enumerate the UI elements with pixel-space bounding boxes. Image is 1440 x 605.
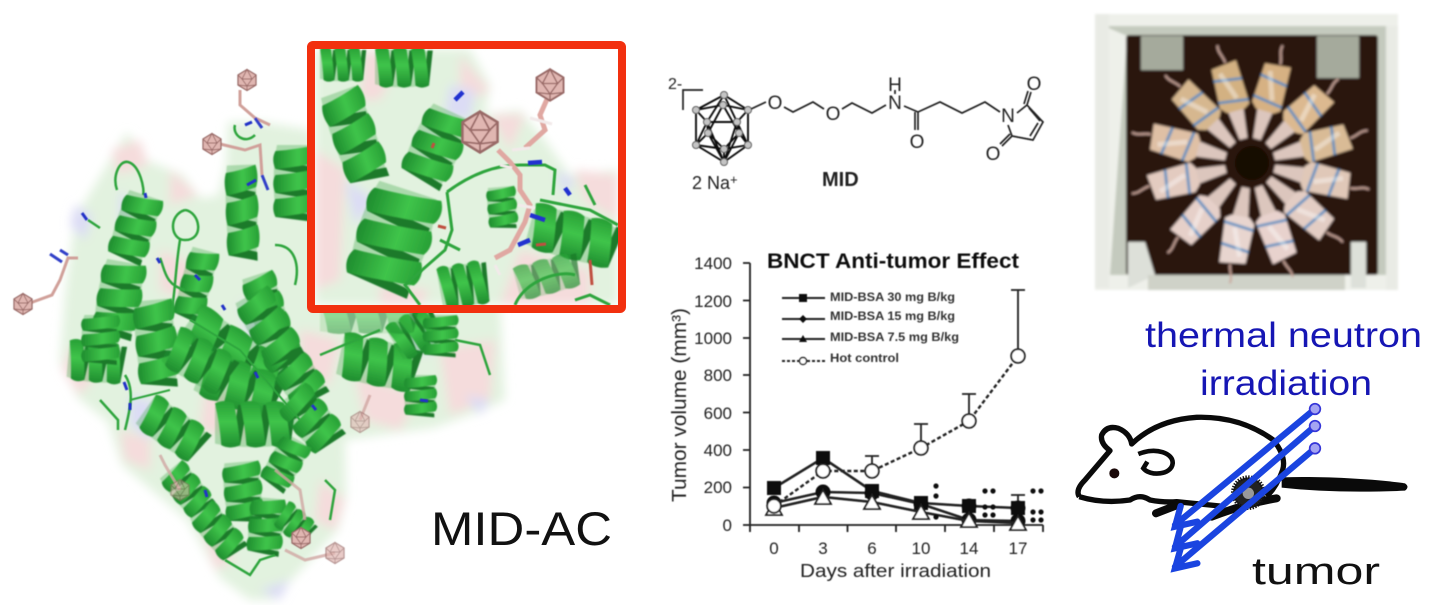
x axis labels: 17: [1009, 539, 1027, 558]
mouse ear: [1138, 451, 1173, 474]
legend: [782, 292, 959, 365]
protein loops and side chains: [88, 125, 490, 575]
atom labels: O: [826, 104, 840, 125]
y axis labels: 800: [704, 366, 732, 385]
series: MID-BSA 30 mg B/kg: [767, 451, 1025, 515]
blue side chain tips: [82, 122, 428, 497]
x axis labels: 0: [769, 539, 779, 558]
carborane cage: [692, 92, 752, 166]
x axis labels: 3: [818, 539, 828, 558]
atom labels: N: [888, 93, 902, 114]
protein ribbon helices: [66, 145, 459, 564]
x axis labels: 14: [960, 539, 978, 558]
x axis labels: 6: [867, 539, 877, 558]
tumor: [1233, 477, 1264, 508]
neutron beam arrows: [1175, 409, 1315, 568]
central gap: [1235, 146, 1269, 180]
x axis title: Days after irradiation: [800, 561, 991, 581]
panel: BNCT anti-tumor effect line chart: [669, 250, 1044, 581]
atom labels: O: [1027, 74, 1041, 95]
compound name: MID: [822, 169, 859, 191]
panel: MID chemical structure: 2 Na: [692, 173, 730, 193]
inset interior: [315, 47, 626, 311]
mice: [1128, 41, 1372, 286]
panel: red zoom inset: [311, 45, 626, 311]
panel: photo of irradiation holder with twelve mice: [1095, 14, 1398, 290]
panel: MID chemical structure: [668, 74, 1043, 193]
mouse eye: [1109, 468, 1119, 478]
atom labels: [768, 74, 1041, 165]
label: MID-AC: MID-AC: [431, 502, 612, 555]
significance asterisks: [933, 483, 1044, 523]
label: thermal neutron irradiation: [1145, 316, 1422, 403]
mouse tail: [1282, 477, 1407, 492]
label: thermal neutron irradiation: thermal neutron: [1145, 316, 1422, 355]
legend: MID-BSA 15 mg B/kg: [830, 311, 955, 323]
y axis labels: 600: [704, 404, 732, 423]
legend: MID-BSA 30 mg B/kg: [830, 292, 955, 304]
series: MID-BSA 7.5 mg B/kg: [766, 490, 1026, 530]
x axis labels: [769, 539, 1027, 558]
y axis labels: 1000: [694, 329, 732, 348]
diagram: mouse with tumor and neutron beams: [1078, 404, 1407, 568]
atom labels: O: [768, 93, 782, 114]
series: Hot control: [767, 349, 1025, 513]
charge and counter-ion text: 2-: [668, 76, 682, 93]
mouse feet: [1156, 498, 1277, 517]
beam source dots: [1310, 404, 1320, 454]
axes: [743, 263, 1043, 532]
y axis title: Tumor volume (mm³): [669, 308, 691, 502]
label: thermal neutron irradiation: irradiation: [1200, 364, 1372, 403]
y axis labels: 200: [704, 478, 732, 497]
legend: MID-BSA 7.5 mg B/kg: [830, 332, 959, 344]
atom labels: O: [910, 132, 924, 153]
panel: MID-AC protein structure: [14, 70, 505, 600]
chart title: BNCT Anti-tumor Effect: [767, 250, 1019, 273]
y axis labels: [694, 254, 732, 535]
red frame: [311, 45, 622, 309]
x axis labels: 10: [912, 539, 930, 558]
y axis labels: 1400: [694, 254, 732, 273]
legend: Hot control: [830, 353, 899, 365]
y axis labels: 1200: [694, 292, 732, 311]
boron cage linkers: [30, 90, 370, 560]
boron cages: [14, 70, 369, 564]
panel: MID chemical structure: +: [730, 172, 738, 187]
y axis labels: 400: [704, 441, 732, 460]
atom labels: H: [888, 75, 902, 96]
protein molecular surface: [60, 122, 505, 600]
atom labels: O: [986, 144, 1000, 165]
atom labels: N: [1001, 106, 1015, 127]
y axis labels: 0: [723, 516, 732, 535]
label: tumor: tumor: [1252, 551, 1380, 593]
mouse outline: [1078, 417, 1284, 506]
corner plates: [1141, 36, 1359, 78]
linker bonds: [683, 90, 1043, 146]
error bars: [865, 290, 1025, 508]
series: MID-BSA 15 mg B/kg: [766, 484, 1026, 528]
